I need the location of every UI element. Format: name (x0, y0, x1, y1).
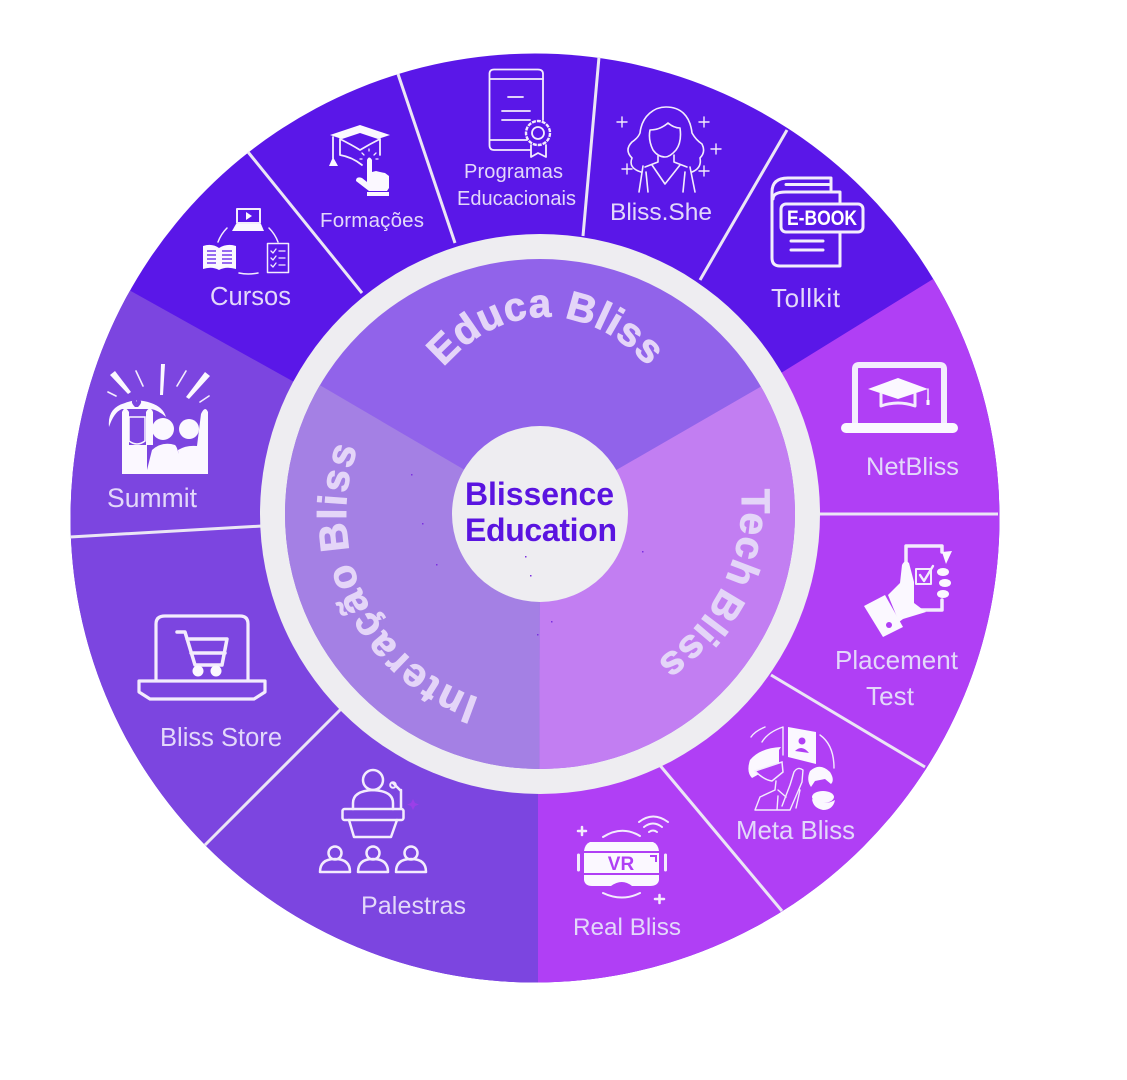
divider: Formações / Programas (398, 74, 455, 243)
item: Placement Test (835, 546, 959, 711)
item: Palestras (320, 770, 466, 920)
grey ring (260, 234, 820, 794)
curved heading: Interação Bliss: Interação Bliss (316, 445, 477, 724)
item: Formações (320, 125, 424, 232)
sector: Interação Bliss activities (70, 290, 538, 982)
label: Bliss.She: Bliss.She (610, 199, 712, 226)
item: Cursos (203, 209, 291, 311)
divider: Meta / Real (658, 763, 782, 911)
icon: speaker at podium with audience (320, 770, 426, 872)
label: Programas Educacionais: Educacionais (457, 188, 576, 210)
center title (465, 476, 617, 548)
icon: VR headset: VR (608, 854, 634, 875)
item: Meta Bliss (736, 727, 855, 845)
divider: Store / Palestras (205, 708, 342, 845)
label: Formações: Formações (320, 209, 424, 232)
item: Tollkit (771, 178, 863, 313)
item: Bliss.She (610, 107, 721, 226)
divider: Cursos / Formações (248, 152, 362, 293)
center title: Blissence (465, 476, 614, 512)
label: Programas Educacionais: Programas (464, 161, 563, 183)
wedge: Tech Bliss (539, 386, 795, 769)
label: Cursos: Cursos (210, 283, 291, 311)
wedge: Educa Bliss (280, 255, 800, 775)
label: Summit: Summit (107, 483, 198, 513)
item: NetBliss (841, 365, 959, 481)
tiny dots (411, 474, 644, 636)
icon: celebrating people (108, 364, 210, 474)
label: Placement Test: Test (866, 681, 915, 711)
label: Placement Test: Placement (835, 645, 959, 675)
label: Meta Bliss: Meta Bliss (736, 817, 855, 845)
sector: Tech Bliss products (538, 279, 1000, 982)
divider: Summit / Store (70, 526, 262, 537)
wheel infographic (70, 54, 1000, 982)
item: Real Bliss (573, 816, 681, 941)
label: Real Bliss: Real Bliss (573, 914, 681, 941)
divider: Programas / Bliss.She (583, 57, 599, 236)
item: Programas Educacionais (457, 70, 576, 210)
outer ring sectors (70, 54, 1000, 982)
label: Tollkit: Tollkit (771, 283, 841, 313)
divider: NetBliss / Placement (817, 512, 998, 516)
curved heading: Tech Bliss: Tech Bliss (660, 488, 770, 674)
icon: graduation cap with pointing hand (329, 125, 390, 196)
item: Bliss Store (139, 616, 282, 752)
icon: courses cycle (203, 209, 288, 274)
icon: e-book: E-BOOK (787, 207, 857, 230)
item: Summit (107, 364, 210, 513)
label: NetBliss: NetBliss (866, 453, 959, 481)
divider: Bliss.She / Tollkit (700, 130, 787, 280)
center title: Education (465, 512, 617, 548)
sector: Educa Bliss programs (70, 54, 1000, 982)
wedge: Interação Bliss (285, 385, 540, 769)
icon: VR user with game devices (748, 727, 835, 810)
label: Bliss Store: Bliss Store (160, 724, 282, 752)
inner wedges (285, 259, 795, 769)
curved heading: Educa Bliss: Educa Bliss (425, 291, 660, 366)
icon: woman with sparkles (617, 107, 721, 192)
divider: Placement / Meta (771, 675, 925, 767)
label: Palestras: Palestras (361, 892, 466, 920)
icon: laptop with shopping cart (139, 616, 265, 699)
icon: hand holding phone (864, 546, 952, 637)
icon: tablet certificate (490, 70, 550, 157)
center circle (452, 426, 628, 602)
icon: laptop with cap (841, 365, 958, 433)
